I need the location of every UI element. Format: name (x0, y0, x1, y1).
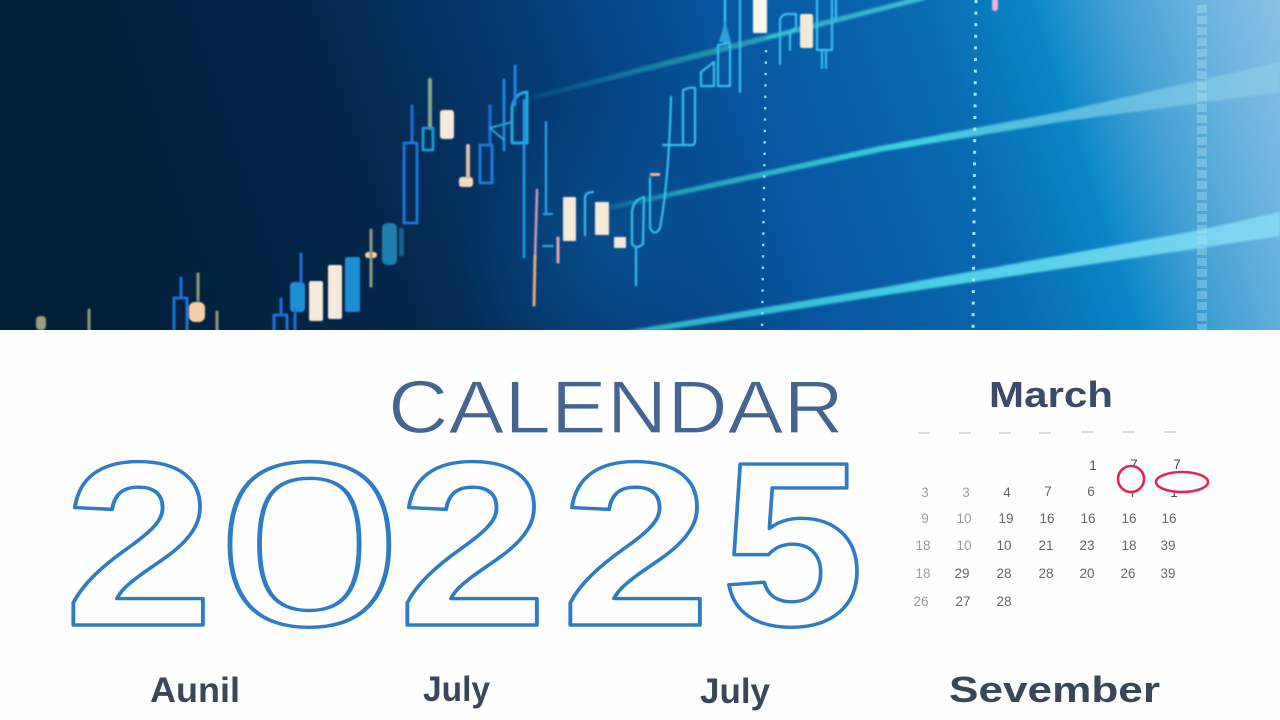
date grid: 7 (1173, 457, 1181, 472)
month label: July (second): July (700, 672, 771, 711)
date grid: 6 (1087, 484, 1095, 499)
trend lines (533, 0, 1280, 331)
date grid: 7 (1129, 485, 1137, 500)
date grid: 16 (1161, 511, 1177, 526)
year: 2025 outlined numerals: 5 (721, 414, 864, 675)
date grid: 4 (1003, 485, 1011, 500)
date grid: 27 (955, 594, 971, 609)
date grid: 29 (954, 566, 970, 581)
weekday placeholder dashes (918, 432, 1176, 433)
date grid: 1 (1089, 458, 1097, 473)
blue wicks (181, 66, 515, 330)
date grid: 28 (996, 566, 1012, 581)
date grid: 18 (915, 538, 931, 553)
date grid (913, 457, 1181, 609)
date grid: 23 (1079, 538, 1095, 553)
date grid: 9 (921, 511, 929, 526)
year: 2025 outlined numerals (64, 413, 864, 675)
month label: Aunil: Aunil (150, 671, 240, 710)
date grid: 26 (1120, 566, 1136, 581)
date grid: 20 (1079, 566, 1095, 581)
outlined cyan candles (512, 0, 836, 285)
tan and olive wicks (89, 80, 558, 330)
year: 2025 outlined numerals: 2 (398, 414, 548, 675)
date grid: 1 (1170, 485, 1178, 500)
date grid: 10 (956, 538, 972, 553)
title: CALENDAR: CALENDAR (388, 365, 844, 449)
hero image: candlestick chart (0, 0, 1280, 330)
date grid: 3 (962, 485, 970, 500)
candlesticks (36, 0, 998, 338)
month label: Sevember: Sevember (949, 669, 1160, 710)
date grid: 16 (1080, 511, 1096, 526)
date grid: 18 (915, 566, 931, 581)
date grid: 21 (1038, 538, 1054, 553)
date grid: 10 (996, 538, 1012, 553)
date grid: 3 (921, 485, 929, 500)
dotted vertical guides (762, 0, 1202, 330)
year: 2025 outlined numerals: 2 (561, 414, 711, 675)
date grid: 7 (1044, 484, 1052, 499)
date grid: 18 (1121, 538, 1137, 553)
year: 2025 outlined numerals: 2 (64, 414, 214, 675)
month heading: March (989, 374, 1113, 415)
date grid: 10 (956, 511, 972, 526)
date grid: 39 (1160, 566, 1176, 581)
year: 2025 outlined numerals: 0 (217, 413, 402, 675)
date grid: 7 (1130, 457, 1138, 472)
date grid: 28 (1038, 566, 1054, 581)
date grid: 26 (913, 594, 929, 609)
date grid: 19 (998, 511, 1014, 526)
red hand-drawn oval on date (1156, 472, 1208, 492)
solid blue candles (290, 223, 404, 312)
date grid: 16 (1039, 511, 1055, 526)
solid pale candles (36, 0, 813, 330)
date grid: 16 (1121, 511, 1137, 526)
date grid: 28 (996, 594, 1012, 609)
month label: July: July (423, 670, 490, 709)
outlined blue candles (174, 128, 492, 338)
red hand-drawn circle on date (1118, 466, 1144, 492)
date grid: 39 (1160, 538, 1176, 553)
calendar: March (913, 374, 1208, 609)
